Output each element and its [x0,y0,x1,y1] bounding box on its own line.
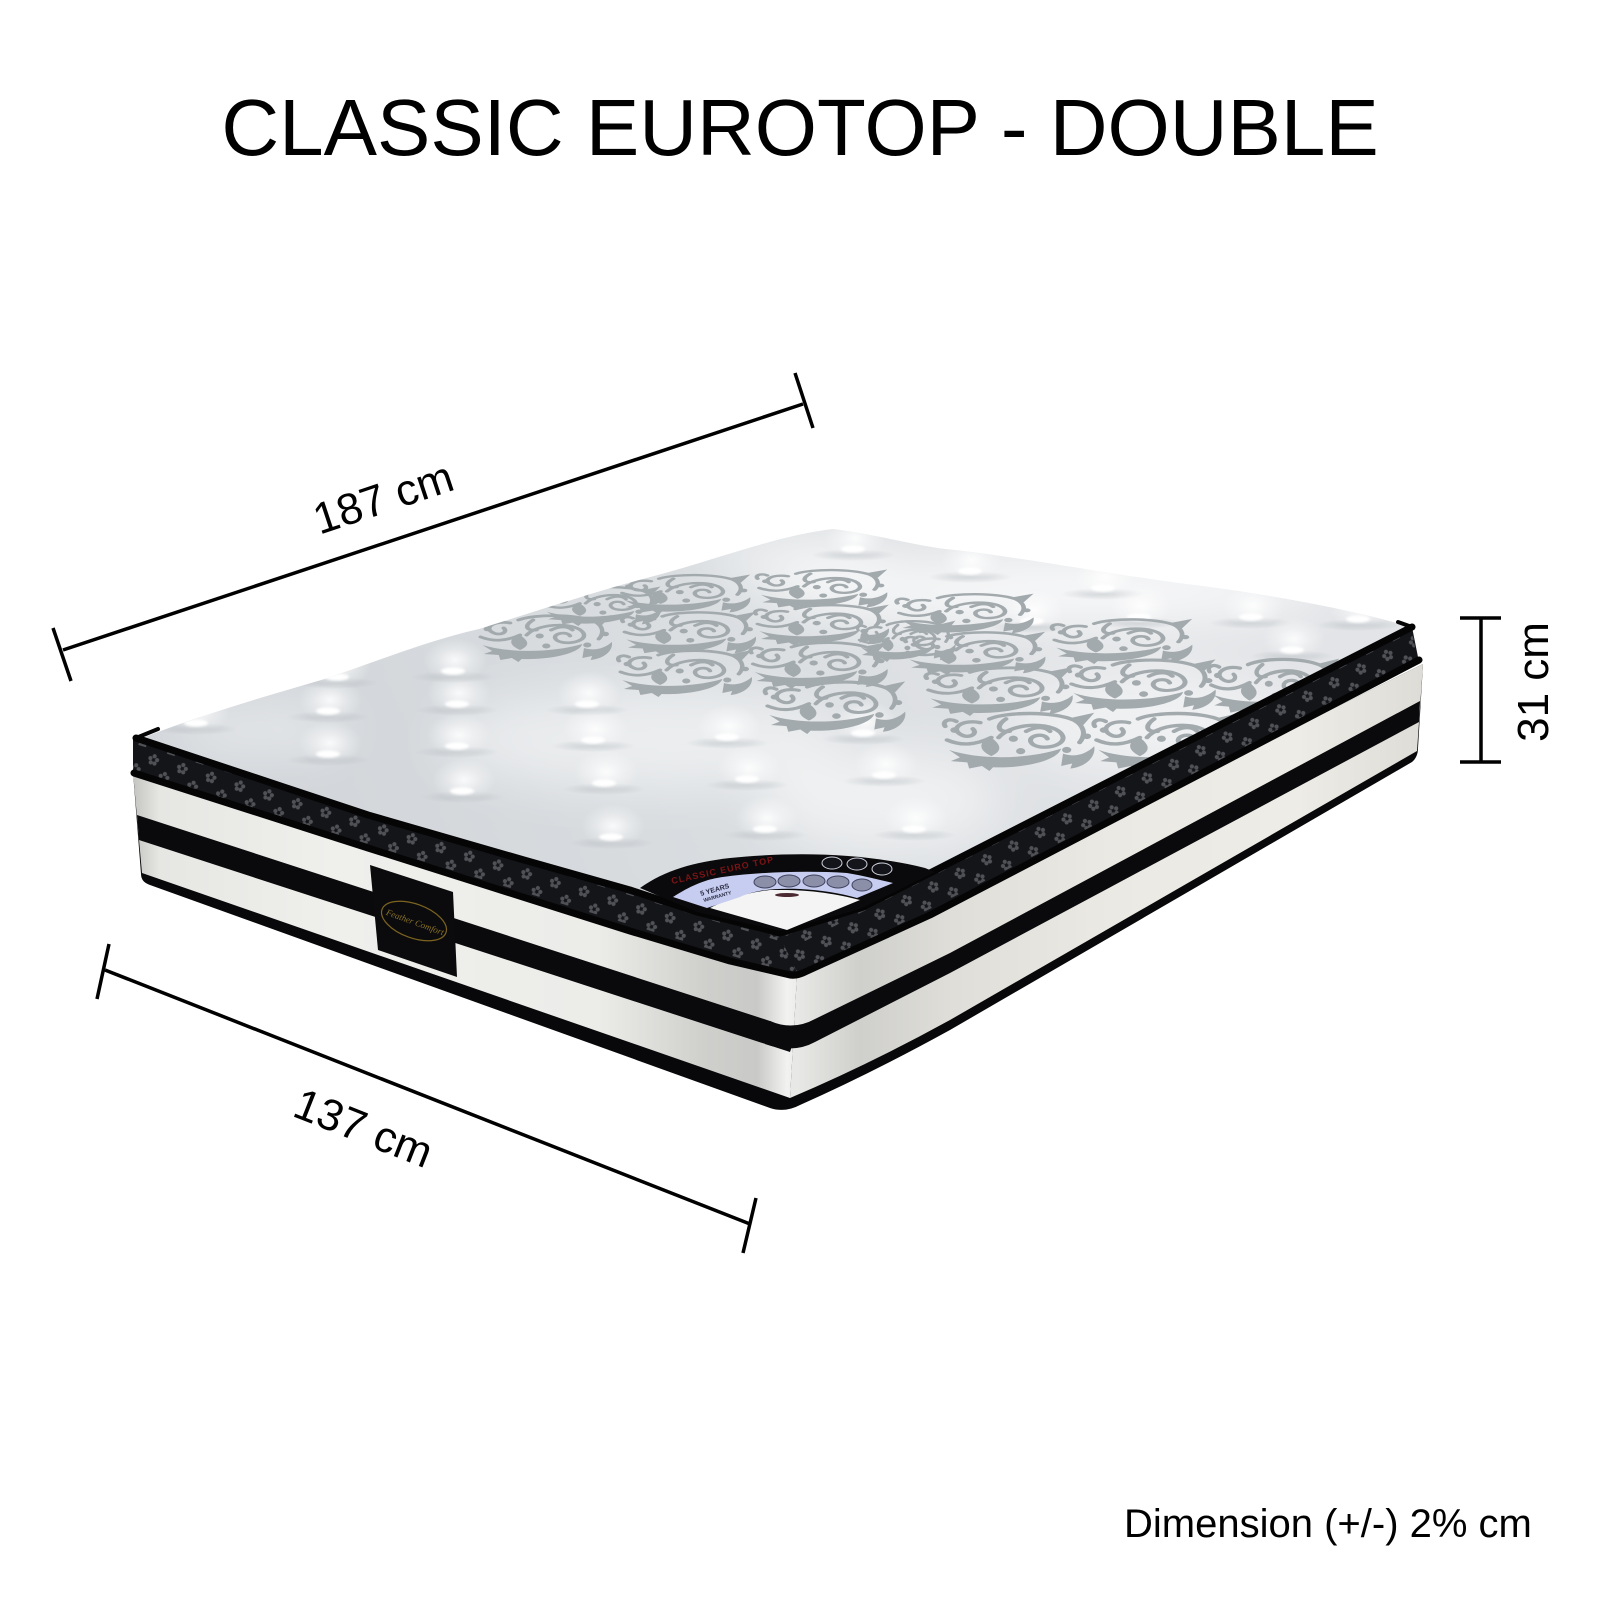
brand patch [370,865,457,977]
logo script: Feather Comfort [384,907,446,937]
soft lighting [170,536,1330,850]
label: 31 cm: 31 cm [1509,622,1558,742]
right black strap [765,701,1420,1049]
certification badges [822,857,892,875]
left black strap [137,815,794,1052]
red stitch mark [775,893,799,897]
gold logo oval [376,893,452,949]
red product name: CLASSIC EURO TOP [670,854,775,886]
mattress base and bottom piping [133,664,1423,1110]
rear corner piping [136,622,1412,738]
title: CLASSIC EUROTOP - DOUBLE [221,83,1379,172]
right flower pattern [780,631,1417,972]
mattress [133,516,1423,1110]
corner label [640,854,935,931]
top surface [136,516,1412,933]
pillow top border band [133,627,1419,976]
label window [710,890,860,930]
label: 137 cm: 137 cm [287,1079,439,1178]
tufts [154,516,1400,849]
lower piping [134,660,1419,975]
right side panel [790,664,1423,1098]
dimension line: width 137 cm [97,944,756,1253]
warranty subtext: WARRANTY [703,890,733,904]
tolerance note: Dimension (+/-) 2% cm [1124,1502,1532,1546]
dimension line: height 31 cm [1460,617,1501,763]
upper piping [136,627,1412,933]
damask pattern [478,570,1339,771]
left side panel [133,772,797,1098]
left flower pattern [133,740,797,972]
label: 187 cm: 187 cm [307,452,460,544]
lavender strip [673,872,893,908]
feature icons [754,875,872,891]
warranty text: 5 YEARS [700,883,731,898]
dimension line: length 187 cm [53,373,813,681]
